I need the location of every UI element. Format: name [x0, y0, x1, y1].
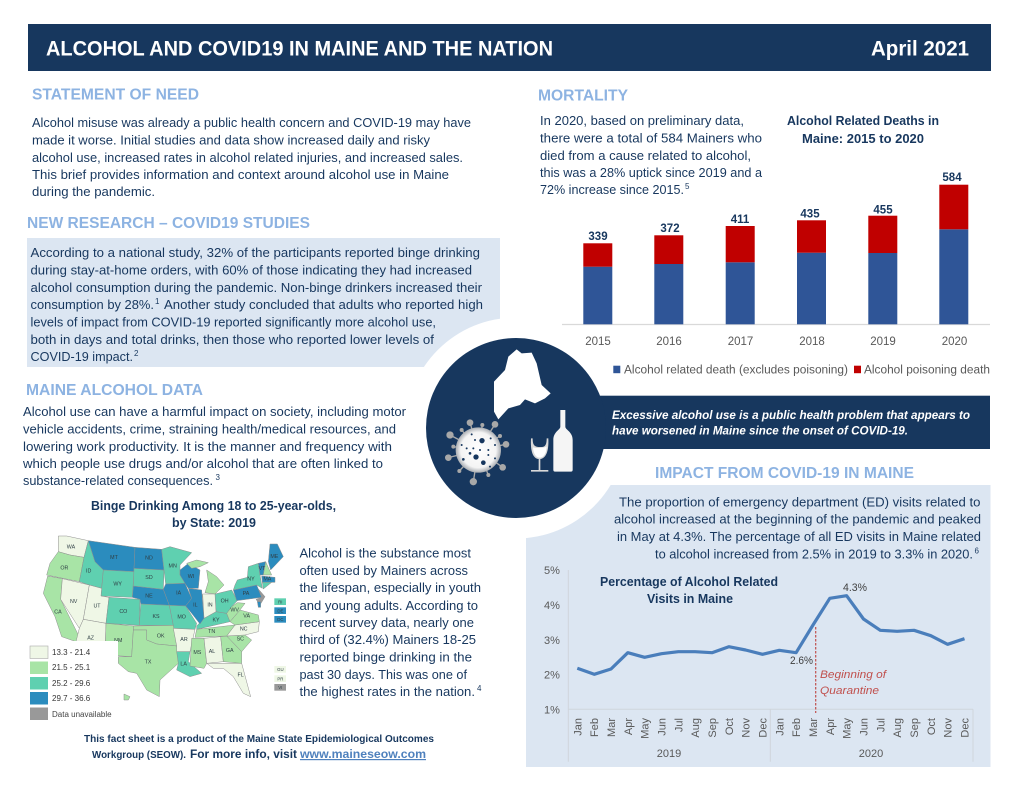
stacked bar chart: alcohol deaths: 2020 — [942, 336, 967, 348]
map legend — [25, 641, 118, 721]
map legend: Data unavailable — [52, 710, 112, 719]
text block: maine alcohol data: lowering work productivity. It is the manner and frequency with — [23, 439, 392, 454]
text block: impact — [614, 495, 981, 561]
line chart: percentage of alcohol related visits: 2020 — [859, 748, 883, 760]
choropleth map of US binge drinking by state: GU — [277, 667, 284, 672]
stacked bar chart: alcohol deaths: 2018 — [799, 336, 825, 348]
month labels: Jul — [875, 718, 887, 732]
map title — [91, 499, 336, 530]
footer credit — [84, 734, 434, 761]
text block: alcohol substance: Alcohol is the substance most — [300, 546, 471, 560]
choropleth map of US binge drinking by state: VT — [259, 566, 266, 572]
choropleth map of US binge drinking by state: VA — [243, 613, 250, 619]
text block: impact: The proportion of emergency department (ED) visits related to — [619, 495, 980, 510]
month labels: Jun — [656, 718, 668, 736]
choropleth map of US binge drinking by state: IN — [207, 602, 213, 608]
heading: maine alcohol data: MAINE ALCOHOL DATA — [26, 382, 203, 399]
text block: statement of need: alcohol use, increased rates in alcohol related injuries, and increased sales. — [32, 150, 463, 165]
month labels: Mar — [606, 718, 618, 737]
line chart: percentage of alcohol related visits: Quarantine — [820, 685, 879, 697]
map legend: 25.2 - 29.6 — [52, 679, 91, 688]
choropleth map of US binge drinking by state: OH — [221, 599, 229, 605]
choropleth map of US binge drinking by state: WV — [230, 608, 239, 614]
map title: Binge Drinking Among 18 to 25-year-olds, — [91, 499, 336, 513]
text block: alcohol substance: recent survey data, nearly one — [300, 615, 474, 630]
choropleth map of US binge drinking by state: DE — [277, 608, 283, 613]
choropleth map of US binge drinking by state: WY — [113, 582, 122, 588]
text block: new research: levels of impact from COVID-19 reported significantly more alcohol use, — [30, 314, 436, 330]
text block: new research: during stay-at-home orders, with 60% of those indicating they had increased — [30, 262, 472, 278]
month labels: Dec — [758, 718, 770, 738]
text block: new research: Another study concluded that adults who reported high — [164, 297, 483, 312]
month labels: Oct — [724, 718, 736, 735]
text block: statement of need: made it worse. Initial studies and data show increased daily and risky — [32, 132, 430, 148]
text block: alcohol substance: past 30 days. This was one of — [300, 667, 467, 682]
text block: new research — [30, 245, 483, 364]
choropleth map of US binge drinking by state: TN — [208, 629, 215, 635]
month labels: Feb — [589, 718, 601, 737]
choropleth map of US binge drinking by state: ME — [270, 554, 279, 560]
month labels: Jun — [858, 718, 870, 736]
text block: mortality: this was a 28% uptick since 2019 and a — [540, 165, 763, 180]
choropleth map of US binge drinking by state: FL — [238, 672, 244, 678]
heading: statement of need: STATEMENT OF NEED — [32, 86, 199, 104]
text block: new research: both in days and total drinks, then those who reported lower levels of — [30, 332, 434, 347]
icon: state of Maine — [494, 349, 551, 419]
title banner: April 2021 — [871, 38, 969, 60]
choropleth map of US binge drinking by state: SC — [237, 637, 244, 643]
text block: new research: consumption by 28%. — [30, 297, 154, 312]
text block: statement of need: This brief provides information and context around alcohol use in Maine — [32, 167, 449, 182]
line chart: percentage of alcohol related visits: 2% — [544, 670, 560, 682]
choropleth map of US binge drinking by state: VI — [278, 685, 282, 690]
month labels: Sep — [909, 718, 921, 738]
month labels: Nov — [943, 718, 955, 738]
choropleth map of US binge drinking by state: TX — [145, 659, 152, 665]
map title: by State: 2019 — [172, 516, 256, 530]
choropleth map of US binge drinking by state: WA — [67, 544, 76, 550]
panel: new research background — [27, 238, 500, 367]
chart title: deaths — [787, 114, 939, 146]
choropleth map of US binge drinking by state: AL — [209, 649, 215, 655]
bar chart legend — [613, 364, 990, 376]
text block: maine alcohol data: vehicle accidents, crime, straining health/medical resources, and — [23, 422, 396, 436]
stacked bar chart: alcohol deaths — [562, 172, 990, 348]
choropleth map of US binge drinking by state: MA — [263, 576, 272, 582]
text block: impact: alcohol increased at the beginning of the pandemic and peaked — [614, 512, 981, 527]
text block: alcohol substance: and young adults. According to — [300, 598, 478, 613]
choropleth map of US binge drinking by state: MO — [177, 615, 186, 621]
text block: maine alcohol data: 3 — [216, 473, 220, 482]
stacked bar chart: alcohol deaths: 339 — [588, 231, 608, 243]
choropleth map of US binge drinking by state: KY — [212, 617, 220, 623]
map legend: 29.7 - 36.6 — [52, 694, 91, 703]
heading: impact from covid-19: IMPACT FROM COVID-19 IN MAINE — [655, 465, 914, 482]
line chart: percentage of alcohol related visits: 2019 — [657, 748, 681, 760]
panel: impact background — [526, 485, 990, 767]
text block: maine alcohol data: substance-related consequences. — [23, 473, 213, 488]
text block: alcohol substance: the lifespan, especially in youth — [300, 580, 481, 595]
text block: maine alcohol data: which people use drugs and/or alcohol that are often linked to — [22, 456, 383, 471]
chart title: deaths: Alcohol Related Deaths in — [787, 114, 939, 128]
choropleth map of US binge drinking by state: PR — [277, 676, 283, 681]
choropleth map of US binge drinking by state: ND — [145, 556, 153, 562]
choropleth map of US binge drinking by state: KS — [152, 614, 160, 620]
choropleth map of US binge drinking by state: AZ — [87, 635, 95, 641]
line chart: percentage of alcohol related visits: 1% — [544, 704, 560, 716]
text block: alcohol substance: 4 — [477, 684, 482, 693]
choropleth map of US binge drinking by state: NE — [145, 594, 153, 600]
callout banner: have worsened in Maine since the onset of COVID-19. — [612, 424, 908, 438]
map legend: 21.5 - 25.1 — [52, 663, 91, 672]
map legend: 13.3 - 21.4 — [52, 648, 91, 657]
choropleth map of US binge drinking by state: CO — [119, 609, 127, 615]
text block: statement of need — [32, 115, 471, 199]
month labels — [572, 718, 972, 739]
text block: new research: alcohol consumption during the pandemic. Non-binge drinkers increased their — [30, 280, 483, 295]
callout banner: Excessive alcohol use is a public health problem that appears to — [612, 408, 970, 422]
stacked bar chart: alcohol deaths: 411 — [731, 214, 750, 226]
text block: maine alcohol data — [22, 404, 407, 488]
text block: alcohol substance: the highest rates in the nation. — [300, 684, 475, 699]
line chart: percentage of alcohol related visits: Beginning of — [820, 669, 887, 681]
stacked bar chart: alcohol deaths: 455 — [873, 204, 893, 216]
month labels: Aug — [690, 718, 702, 738]
choropleth map of US binge drinking by state: CA — [54, 610, 62, 616]
footer credit: www.maineseow.com — [299, 747, 426, 761]
choropleth map of US binge drinking by state: ID — [86, 569, 91, 575]
text block: statement of need: during the pandemic. — [32, 184, 155, 199]
choropleth map of US binge drinking by state: OK — [157, 633, 165, 639]
choropleth map of US binge drinking by state: SD — [145, 575, 153, 581]
choropleth map of US binge drinking by state: AR — [180, 637, 188, 643]
month labels: May — [842, 718, 854, 739]
month labels: Dec — [960, 718, 972, 738]
choropleth map of US binge drinking by state: MS — [193, 650, 202, 656]
choropleth map of US binge drinking by state: PA — [243, 591, 250, 597]
choropleth map of US binge drinking by state: NV — [70, 599, 78, 605]
heading: mortality: MORTALITY — [538, 88, 629, 104]
month labels: Sep — [707, 718, 719, 738]
choropleth map of US binge drinking by state: UT — [93, 604, 101, 610]
text block: new research: 2 — [134, 349, 139, 358]
text block: statement of need: Alcohol misuse was already a public health concern and COVID-19 may have — [32, 115, 471, 130]
month labels: Nov — [741, 718, 753, 738]
text block: new research: 1 — [155, 297, 160, 306]
text block: mortality: there were a total of 584 Mainers who — [540, 130, 762, 146]
choropleth map of US binge drinking by state: NY — [247, 576, 255, 582]
line chart: percentage of alcohol related visits: 5% — [544, 565, 560, 577]
month labels: May — [640, 718, 652, 739]
choropleth map of US binge drinking by state: RI — [278, 599, 283, 604]
heading: new research: NEW RESEARCH – COVID19 STUDIES — [27, 215, 310, 232]
month labels: Jan — [774, 718, 786, 736]
footer credit: This fact sheet is a product of the Maine State Epidemiological Outcomes — [84, 734, 434, 745]
line chart: percentage of alcohol related visits: 4.3% — [843, 582, 867, 594]
choropleth map of US binge drinking by state: OR — [60, 566, 68, 572]
icon: bottle — [553, 410, 573, 472]
text block: impact: 6 — [974, 546, 980, 556]
line chart title: Percentage of Alcohol Related — [600, 575, 778, 589]
choropleth map of US binge drinking by state: IA — [176, 591, 182, 597]
callout banner — [560, 396, 990, 449]
stacked bar chart: alcohol deaths: 2016 — [656, 336, 682, 348]
text block: alcohol substance: third of (32.4%) Mainers 18-25 — [300, 632, 476, 647]
choropleth map of US binge drinking by state: DC — [277, 617, 283, 622]
text block: mortality — [540, 113, 763, 197]
line chart: percentage of alcohol related visits: 3% — [544, 635, 560, 647]
choropleth map of US binge drinking by state: MT — [110, 555, 119, 561]
month labels: Jan — [572, 718, 584, 736]
text block: mortality: 72% increase since 2015. — [540, 182, 684, 197]
stacked bar chart: alcohol deaths: 2019 — [870, 336, 896, 348]
choropleth map of US binge drinking by state — [43, 536, 286, 700]
line chart title — [600, 575, 778, 606]
footer credit: For more info, visit — [190, 747, 297, 761]
month labels: Feb — [791, 718, 803, 737]
choropleth map of US binge drinking by state: LA — [180, 661, 187, 667]
choropleth map of US binge drinking by state: NM — [114, 638, 122, 644]
stacked bar chart: alcohol deaths: 584 — [942, 172, 962, 184]
text block: impact: to alcohol increased from 2.5% in 2019 to 3.3% in 2020. — [655, 546, 973, 561]
choropleth map of US binge drinking by state: NC — [240, 626, 248, 632]
choropleth map of US binge drinking by state: IL — [193, 602, 198, 608]
chart title: deaths: Maine: 2015 to 2020 — [802, 132, 924, 146]
data line — [577, 596, 964, 674]
choropleth map of US binge drinking by state: WI — [188, 574, 194, 580]
choropleth map of US binge drinking by state: GA — [226, 648, 234, 654]
text block: alcohol substance: often used by Mainers across — [300, 563, 468, 578]
text block: new research: COVID-19 impact. — [30, 349, 133, 364]
bar chart legend: Alcohol poisoning death — [864, 364, 990, 376]
stacked bar chart: alcohol deaths: 2017 — [728, 336, 753, 348]
white ring around emblem — [406, 318, 626, 538]
month labels: Oct — [926, 718, 938, 735]
text block: mortality: 5 — [685, 182, 690, 191]
stacked bar chart: alcohol deaths: 435 — [800, 208, 820, 220]
footer credit: Workgroup (SEOW). — [92, 750, 186, 761]
line chart: percentage of alcohol related visits: 4% — [544, 600, 560, 612]
text block: alcohol substance — [300, 546, 482, 699]
month labels: Mar — [808, 718, 820, 737]
text block: impact: in May at 4.3%. The percentage of all ED visits in Maine related — [617, 529, 981, 544]
line chart: percentage of alcohol related visits: 2.6% — [790, 655, 813, 667]
text block: maine alcohol data: Alcohol use can have a harmful impact on society, including motor — [23, 404, 407, 419]
bar chart legend: Alcohol related death (excludes poisoning) — [624, 364, 848, 376]
month labels: Apr — [623, 718, 635, 735]
emblem: dark circle with icons — [426, 338, 606, 518]
icon: coronavirus — [446, 420, 509, 485]
quarantine marker line — [815, 627, 817, 713]
stacked bar chart: alcohol deaths: 372 — [660, 223, 680, 235]
text block: mortality: died from a cause related to alcohol, — [540, 148, 751, 163]
month labels: Aug — [892, 718, 904, 738]
line chart title: Visits in Maine — [647, 592, 733, 606]
icon: wine glass — [531, 438, 548, 472]
month labels: Jul — [673, 718, 685, 732]
stacked bar chart: alcohol deaths: 2015 — [585, 336, 611, 348]
text block: alcohol substance: reported binge drinking in the — [300, 650, 472, 664]
month labels: Apr — [825, 718, 837, 735]
text block: new research: According to a national study, 32% of the participants reported binge drinking — [30, 245, 480, 260]
title banner — [28, 24, 991, 71]
title banner: ALCOHOL AND COVID19 IN MAINE AND THE NATION — [46, 38, 553, 60]
line chart: percentage of alcohol related visits — [544, 565, 973, 762]
choropleth map of US binge drinking by state: MN — [169, 563, 177, 569]
text block: mortality: In 2020, based on preliminary data, — [540, 113, 744, 128]
